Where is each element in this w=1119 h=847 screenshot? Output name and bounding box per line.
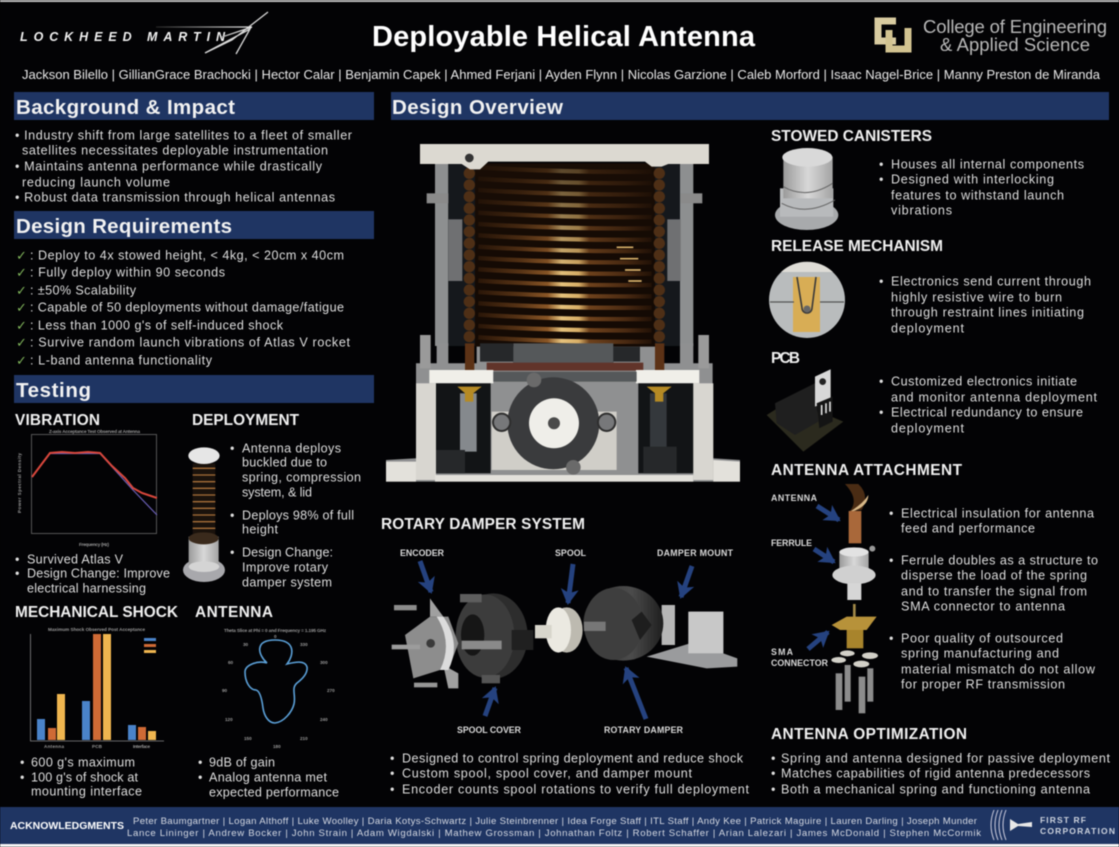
chart: vibration spectrum: Frequency (Hz) xyxy=(79,542,109,547)
rotary damper notes: Designed to control spring deployment and reduce shock xyxy=(402,752,744,766)
deployment notes: Deploys 98% of full xyxy=(242,508,354,522)
panel: design requirements: ✓ xyxy=(16,248,27,263)
logo: Lockheed Martin xyxy=(20,12,268,54)
stowed canister notes: features to withstand launch xyxy=(891,188,1064,202)
rotary damper notes xyxy=(390,752,750,796)
deployment notes: • xyxy=(230,442,234,456)
chart: antenna radiation pattern: 30 xyxy=(243,642,249,647)
panel: acknowledgments footer: Peter Baumgartner | Logan Althoff | Luke Woolley | Daria Kotys-Schwartz | Julie Steinbrenner | Idea Forge Staff | ITL Staff | Andy Kee | Patrick Maguire | Lauren Darling | Joseph Munder xyxy=(133,816,978,827)
deployment notes: Antenna deploys xyxy=(242,442,341,456)
deployment notes: damper system xyxy=(242,576,332,590)
antenna attachment notes: for proper RF transmission xyxy=(901,678,1065,692)
PCB notes xyxy=(879,374,1098,436)
antenna notes: • xyxy=(198,756,202,770)
shock notes: • xyxy=(20,756,24,770)
rotary damper notes: • xyxy=(390,766,394,780)
panel: design requirements: : Survive random launch vibrations of Atlas V rocket xyxy=(30,336,350,350)
chart: mechanical shock bars: PCB xyxy=(92,744,103,749)
section: stowed canisters xyxy=(771,128,1084,230)
logo: First RF Corporation: CORPORATION xyxy=(1040,826,1115,836)
deployment notes: Design Change: xyxy=(242,546,333,560)
shock notes: mounting interface xyxy=(31,784,142,798)
antenna notes: • xyxy=(198,770,202,784)
panel: design requirements xyxy=(14,211,374,368)
chart: antenna radiation pattern: 0 xyxy=(274,634,277,639)
shock notes: 100 g's of shock at xyxy=(31,770,138,784)
PCB notes: deployment xyxy=(891,422,964,436)
stowed canister notes xyxy=(879,158,1084,218)
shock notes: • xyxy=(20,770,24,784)
illustration: exploded rotary damper xyxy=(392,586,737,688)
section: antenna optimization: • xyxy=(771,782,775,796)
vibration notes xyxy=(15,552,170,596)
vibration notes: electrical harnessing xyxy=(27,582,146,596)
panel: design requirements: : Capable of 50 deployments without damage/fatigue xyxy=(30,300,344,314)
panel: background and impact xyxy=(14,92,374,204)
deployment notes: buckled due to xyxy=(242,456,327,470)
label: spool: SPOOL xyxy=(555,548,587,558)
chart: antenna radiation pattern xyxy=(222,628,335,749)
panel: acknowledgments footer xyxy=(0,807,1119,847)
antenna attachment notes: Ferrule doubles as a structure to xyxy=(901,554,1098,568)
stowed canister notes: Houses all internal components xyxy=(891,158,1084,172)
release mechanism notes: • xyxy=(879,274,883,288)
logo: CU College of Engineering: College of Engineering xyxy=(923,16,1107,37)
label: spool cover: SPOOL COVER xyxy=(457,725,522,735)
PCB notes: • xyxy=(879,374,883,388)
section: antenna optimization xyxy=(771,726,1110,796)
chart: vibration spectrum: Power Spectral Density xyxy=(17,453,22,513)
panel: background and impact: Background & Impact xyxy=(16,96,235,119)
vibration notes: Design Change: Improve xyxy=(27,566,170,580)
illustration: stowed canister xyxy=(775,148,838,230)
panel: design requirements: : Deploy to 4x stowed height, < 4kg, < 20cm x 40cm xyxy=(30,248,344,262)
team names: Jackson Bilello | GillianGrace Brachocki | Hector Calar | Benjamin Capek | Ahmed Ferjani | Ayden Flynn | Nicolas Garzione | Caleb Morford | Isaac Nagel-Brice | Manny Preston de Miranda xyxy=(22,67,1101,82)
chart: antenna radiation pattern: 300 xyxy=(320,660,328,665)
chart: antenna radiation pattern: 120 xyxy=(225,717,233,722)
panel: design requirements: ✓ xyxy=(16,335,27,350)
label: SMA connector xyxy=(771,647,829,668)
section: release mechanism: RELEASE MECHANISM xyxy=(771,238,943,255)
illustration: PCB xyxy=(767,369,843,452)
chart: vibration spectrum xyxy=(17,429,157,547)
section: PCB: PCB xyxy=(771,350,800,367)
section: release mechanism xyxy=(769,238,1091,338)
PCB notes: and monitor antenna deployment xyxy=(891,390,1098,404)
antenna attachment notes: and to transfer the signal from xyxy=(901,584,1087,598)
label: encoder: ENCODER xyxy=(400,548,445,558)
label: rotary damper: ROTARY DAMPER xyxy=(604,725,684,735)
deployment notes: Improve rotary xyxy=(242,560,329,574)
deployment notes: • xyxy=(230,546,234,560)
chart: antenna radiation pattern: 150 xyxy=(244,736,252,741)
panel: background and impact: satellites necessitates deployable instrumentation xyxy=(22,144,328,158)
vibration heading: VIBRATION xyxy=(15,412,100,429)
section: PCB xyxy=(767,350,1098,452)
panel: design requirements: ✓ xyxy=(16,300,27,315)
vibration notes: • xyxy=(15,566,19,580)
antenna attachment notes: material mismatch do not allow xyxy=(901,662,1096,676)
section: antenna optimization: Spring and antenna designed for passive deployment xyxy=(781,752,1110,766)
shock notes: 600 g's maximum xyxy=(31,756,135,770)
panel: design requirements: ✓ xyxy=(16,283,27,298)
antenna attachment notes: • xyxy=(889,632,893,646)
panel: testing xyxy=(14,375,374,800)
label: SMA connector: CONNECTOR xyxy=(771,658,829,668)
chart: mechanical shock bars: Interface xyxy=(133,744,150,749)
arrow: damper mount xyxy=(681,566,692,597)
logo: CU College of Engineering: & Applied Science xyxy=(940,34,1090,55)
section: antenna optimization: ANTENNA OPTIMIZATION xyxy=(771,726,967,743)
arrow: spool xyxy=(568,564,573,603)
stowed canister notes: • xyxy=(879,158,883,172)
stowed canister notes: • xyxy=(879,172,883,186)
panel: background and impact: • Robust data transmission through helical antennas xyxy=(15,190,335,204)
antenna attachment notes: • xyxy=(889,506,893,520)
deployment notes xyxy=(230,442,361,590)
antenna attachment notes: Poor quality of outsourced xyxy=(901,632,1063,646)
panel: design overview: Design Overview xyxy=(392,96,563,119)
chart: mechanical shock bars: Antenna xyxy=(44,744,64,749)
stowed canister notes: vibrations xyxy=(891,204,952,218)
chart: vibration spectrum: Z-axis Acceptance Test Observed at Antenna xyxy=(49,429,140,434)
arrow: encoder xyxy=(420,561,431,592)
heading: ROTARY DAMPER SYSTEM xyxy=(381,516,585,533)
panel: design requirements: : Less than 1000 g's of self-induced shock xyxy=(30,318,284,332)
label: antenna: ANTENNA xyxy=(771,493,818,503)
title: Deployable Helical Antenna xyxy=(372,21,756,53)
chart: antenna radiation pattern: 210 xyxy=(300,736,308,741)
panel: design overview xyxy=(381,92,1110,796)
panel: background and impact: • Maintains antenna performance while drastically xyxy=(15,160,323,174)
section: antenna optimization: • xyxy=(771,752,775,766)
arrow: spool cover xyxy=(485,688,495,716)
section: antenna optimization: Matches capabilities of rigid antenna predecessors xyxy=(781,766,1090,780)
antenna attachment notes: Electrical insulation for antenna xyxy=(901,506,1094,520)
PCB notes: Customized electronics initiate xyxy=(891,374,1077,388)
panel: background and impact: reducing launch volume xyxy=(22,176,170,190)
release mechanism notes: through restraint lines initiating xyxy=(891,306,1084,320)
rotary damper notes: • xyxy=(390,782,394,796)
panel: design requirements: : ±50% Scalability xyxy=(30,284,137,298)
chart: mechanical shock bars xyxy=(30,627,164,749)
rotary damper notes: • xyxy=(390,752,394,766)
shock notes xyxy=(20,756,142,798)
panel: background and impact: • Industry shift from large satellites to a fleet of smaller xyxy=(15,128,352,142)
antenna notes: expected performance xyxy=(209,786,339,800)
section: rotary damper system xyxy=(381,516,750,796)
arrow: rotary damper xyxy=(626,668,646,719)
logo: First RF Corporation xyxy=(991,810,1115,840)
deployment notes: spring, compression xyxy=(242,470,361,484)
label: ferrule: FERRULE xyxy=(771,538,812,548)
section: antenna attachment xyxy=(771,462,1098,713)
deployment notes: height xyxy=(242,522,278,536)
chart: antenna radiation pattern: 180 xyxy=(273,744,281,749)
vibration notes: • xyxy=(15,552,19,566)
panel: design requirements: ✓ xyxy=(16,265,27,280)
antenna attachment notes: feed and performance xyxy=(901,522,1035,536)
panel: design requirements: Design Requirements xyxy=(16,215,232,238)
section: antenna attachment: ANTENNA ATTACHMENT xyxy=(771,462,963,479)
arrow: antenna xyxy=(817,506,839,520)
logo: First RF Corporation: FIRST RF xyxy=(1040,815,1086,825)
label: damper mount: DAMPER MOUNT xyxy=(657,548,734,558)
logo: Lockheed Martin: LOCKHEED MARTIN xyxy=(20,30,226,44)
vibration notes: Survived Atlas V xyxy=(27,552,124,566)
release mechanism notes: deployment xyxy=(891,322,964,336)
antenna attachment notes: SMA connector to antenna xyxy=(901,600,1065,614)
section: stowed canisters: STOWED CANISTERS xyxy=(771,128,932,145)
section: antenna optimization: • xyxy=(771,766,775,780)
antenna notes: 9dB of gain xyxy=(209,756,275,770)
panel: testing: Testing xyxy=(16,379,91,402)
rotary damper notes: Encoder counts spool rotations to verify full deployment xyxy=(402,782,750,796)
panel: design requirements: : L-band antenna functionality xyxy=(30,354,213,368)
panel: acknowledgments footer: ACKNOWLEDGMENTS xyxy=(10,820,124,832)
arrow: ferrule xyxy=(814,549,834,562)
antenna notes: Analog antenna met xyxy=(209,770,328,784)
stowed canister notes: Designed with interlocking xyxy=(891,172,1054,186)
chart: antenna radiation pattern: 330 xyxy=(300,642,308,647)
panel: acknowledgments footer: Lance Lininger | Andrew Bocker | John Strain | Adam Wigdalski | Mathew Grossman | Johnathan Foltz | Robert Schaffer | Arian Lalezari | James McDonald | Stephen McCormik xyxy=(127,828,981,839)
illustration: release mechanism xyxy=(769,262,845,338)
release mechanism notes: highly resistive wire to burn xyxy=(891,290,1062,304)
section: antenna optimization: Both a mechanical spring and functioning antenna xyxy=(781,782,1090,796)
antenna notes xyxy=(198,756,339,800)
antenna attachment notes xyxy=(889,506,1098,692)
chart: antenna radiation pattern: 60 xyxy=(228,660,234,665)
mechanical shock heading: MECHANICAL SHOCK xyxy=(15,604,178,621)
deployment heading: DEPLOYMENT xyxy=(192,412,300,429)
label: SMA connector: SMA xyxy=(771,647,794,657)
arrow: SMA connector xyxy=(808,632,828,649)
logo: CU College of Engineering xyxy=(878,16,1107,55)
illustration: antenna attachment exploded view xyxy=(831,484,878,713)
chart: antenna radiation pattern: Theta Slice at Phi = 0 and Frequency = 1.195 GHz xyxy=(224,628,327,633)
chart: antenna radiation pattern: 240 xyxy=(320,717,328,722)
chart: antenna radiation pattern: 270 xyxy=(327,688,335,693)
panel: design requirements: ✓ xyxy=(16,318,27,333)
release mechanism notes: Electronics send current through xyxy=(891,274,1091,288)
panel: design requirements: : Fully deploy within 90 seconds xyxy=(30,266,225,280)
antenna attachment notes: disperse the load of the spring xyxy=(901,568,1087,582)
rotary damper notes: Custom spool, spool cover, and damper mount xyxy=(402,766,692,780)
PCB notes: Electrical redundancy to ensure xyxy=(891,406,1083,420)
panel: design requirements: ✓ xyxy=(16,353,27,368)
chart: mechanical shock bars: Maximum Shock Observed Post Acceptance xyxy=(48,627,145,632)
chart: antenna radiation pattern: 90 xyxy=(222,688,228,693)
antenna attachment notes: • xyxy=(889,554,893,568)
illustration: canister cross-section xyxy=(386,144,740,482)
release mechanism notes xyxy=(879,274,1091,336)
PCB notes: • xyxy=(879,406,883,420)
deployment notes: • xyxy=(230,508,234,522)
antenna attachment notes: spring manufacturing and xyxy=(901,646,1059,660)
antenna heading: ANTENNA xyxy=(195,604,273,621)
illustration: deployed antenna xyxy=(183,447,225,582)
deployment notes: system, & lid xyxy=(242,486,312,500)
